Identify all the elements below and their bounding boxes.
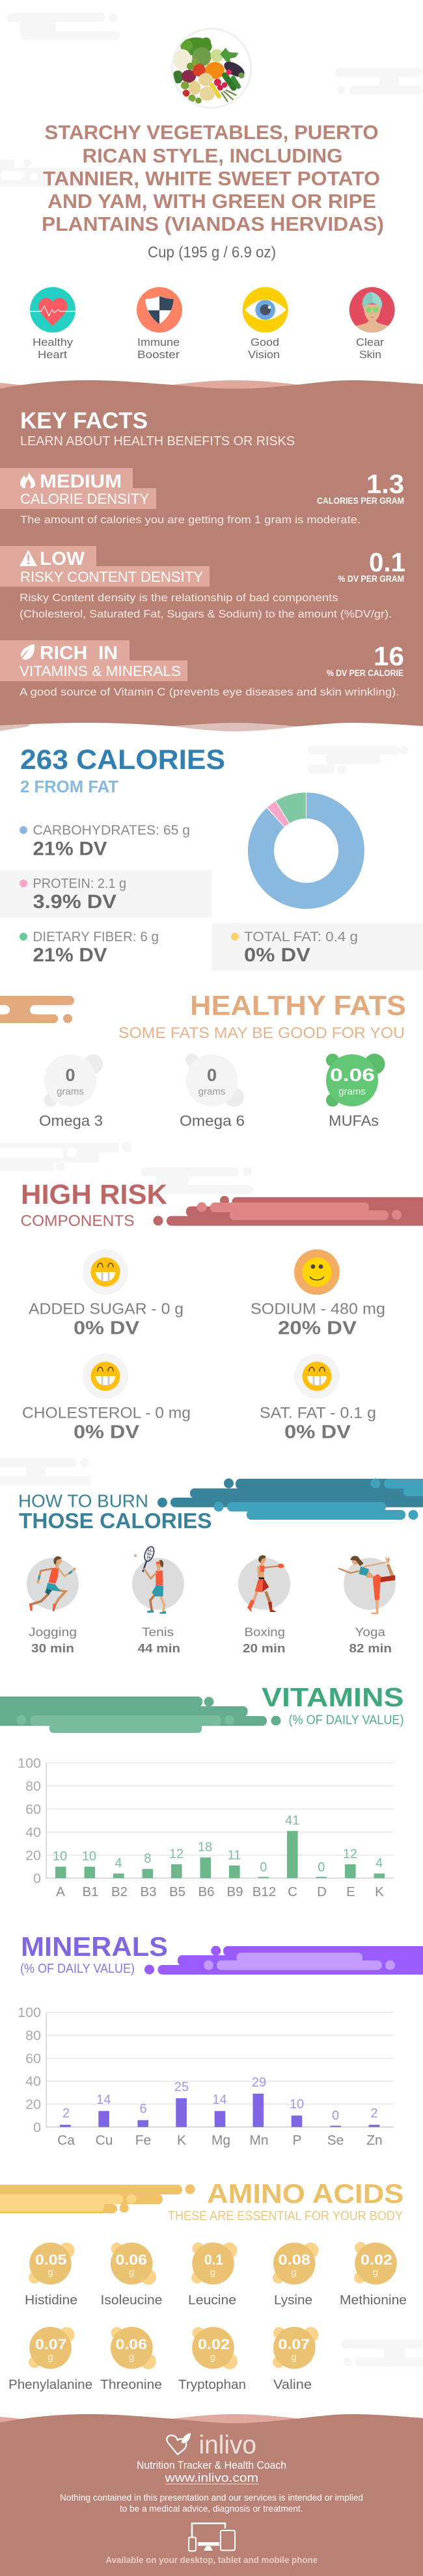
amino: lysine: g <box>291 2267 297 2278</box>
risk: sodium: SODIUM - 480 mg <box>251 1300 385 1318</box>
header graphic: minerals <box>144 1946 423 1975</box>
chart: vitamins: 11 <box>228 1849 241 1863</box>
chart: vitamins: B3 <box>140 1884 157 1899</box>
label: good vision <box>248 336 280 361</box>
title: STARCHY VEGETABLES, PUERTO <box>44 121 379 144</box>
website: www.inlivo.com <box>165 2471 258 2484</box>
legend: dietary fiber <box>20 930 159 966</box>
chart: minerals: 14 <box>212 2093 227 2107</box>
fact: vitamins and minerals: VITAMINS & MINERALS <box>20 663 181 679</box>
chart: minerals: P <box>292 2133 302 2148</box>
panel: key facts <box>0 380 423 731</box>
amino: histidine: Histidine <box>25 2293 77 2308</box>
chart: vitamins: 40 <box>25 1825 41 1840</box>
subheading: minerals: (% OF DAILY VALUE) <box>20 1962 135 1976</box>
chart: vitamins: 20 <box>25 1847 41 1863</box>
risk: saturated fat: SAT. FAT - 0.1 g <box>260 1404 376 1422</box>
fact: vitamins and minerals: A good source of Vitamin C (prevents eye diseases and skin wrinkling). <box>20 686 400 698</box>
risk: cholesterol: 0% DV <box>74 1422 140 1443</box>
background clouds top <box>0 13 423 187</box>
fat: mufas: 0.06 <box>330 1065 375 1085</box>
chart: minerals: 25 <box>174 2080 189 2094</box>
fact: risky content density: % DV PER GRAM <box>338 574 404 584</box>
amino: tryptophan: 0.02 <box>198 2336 230 2352</box>
heading: calories: 263 CALORIES <box>20 744 225 775</box>
amino: phenylalanine: Phenylalanine <box>8 2378 92 2392</box>
chart: minerals: 0 <box>332 2109 339 2123</box>
amino: valine: g <box>291 2352 297 2363</box>
amino: lysine: Lysine <box>274 2293 312 2308</box>
header graphic: burn calories <box>157 1478 423 1520</box>
subheading: components: COMPONENTS <box>21 1212 134 1230</box>
amino: methionine: 0.02 <box>361 2252 392 2268</box>
chart: vitamins: B9 <box>226 1884 243 1899</box>
legend: total fat: 0% DV <box>244 944 310 966</box>
chart: vitamins: 4 <box>375 1856 383 1871</box>
fact: calorie density: CALORIE DENSITY <box>20 491 149 507</box>
label: clear skin <box>356 336 384 361</box>
fat: mufas: MUFAs <box>329 1112 379 1129</box>
wave accents <box>0 380 299 397</box>
subheading: amino acids: THESE ARE ESSENTIAL FOR YOUR BODY <box>168 2209 403 2223</box>
label: good vision: Vision <box>248 348 280 361</box>
heading: amino acids: AMINO ACIDS <box>207 2178 403 2209</box>
risk: saturated fat: 0% DV <box>284 1422 351 1443</box>
icon: devices <box>189 2523 235 2551</box>
fact: calorie density: CALORIES PER GRAM <box>317 496 404 506</box>
amino: histidine: g <box>48 2267 53 2278</box>
chart: vitamins: 0 <box>33 1871 41 1886</box>
amino: isoleucine: g <box>129 2267 134 2278</box>
chart: vitamins: 0 <box>260 1860 267 1875</box>
background clouds high risk <box>0 1143 254 1194</box>
subheading: from fat: 2 FROM FAT <box>20 778 118 796</box>
chart: vitamins: C <box>288 1884 297 1899</box>
heading: vitamins: VITAMINS <box>262 1682 403 1712</box>
amino: leucine: Leucine <box>188 2293 236 2308</box>
label: good vision: Good <box>251 336 279 348</box>
chart: vitamins: B6 <box>198 1884 215 1899</box>
exercise: yoga <box>338 1556 396 1655</box>
chart: vitamins: B1 <box>82 1884 99 1899</box>
heading: key facts: KEY FACTS <box>20 408 148 434</box>
exercise: boxing: 20 min <box>243 1642 285 1655</box>
legend: total fat: TOTAL FAT: 0.4 g <box>244 930 358 944</box>
title: TANNIER, WHITE SWEET POTATO <box>43 167 380 190</box>
chart: minerals: 6 <box>139 2102 147 2116</box>
chart: minerals: Mn <box>249 2133 269 2148</box>
chart: vitamins: 41 <box>285 1814 299 1828</box>
amino: phenylalanine: 0.07 <box>35 2336 66 2352</box>
chart: vitamins: 12 <box>343 1847 357 1862</box>
exercise: boxing <box>238 1555 290 1655</box>
fact: risky content density: (Cholesterol, Saturated Fat, Sugars & Sodium) to the amount (%DV/gr). <box>20 608 392 620</box>
amino: threonine: Threonine <box>100 2378 162 2392</box>
amino: isoleucine: 0.06 <box>116 2252 147 2268</box>
chart: vitamins: 12 <box>169 1847 184 1862</box>
chart: vitamins: B12 <box>252 1884 276 1899</box>
logo: inlivo: inlivo <box>199 2431 256 2460</box>
icon: good vision <box>243 287 288 333</box>
amino: tryptophan: g <box>210 2352 215 2363</box>
chart: minerals: 0 <box>33 2120 41 2135</box>
title: AND YAM, WITH GREEN OR RIPE <box>48 190 376 213</box>
heading: how to burn: HOW TO BURN <box>18 1491 148 1511</box>
icon: immune booster <box>137 287 182 333</box>
logo: inlivo <box>167 2431 256 2460</box>
amino: leucine: 0.1 <box>204 2252 223 2268</box>
exercise: tennis: 44 min <box>138 1642 180 1655</box>
fact: calorie density: MEDIUM <box>40 471 122 492</box>
chart: vitamins: B5 <box>169 1884 185 1899</box>
disclaimer: Nothing contained in this presentation and our services is intended or implied <box>60 2492 363 2503</box>
amino: methionine: g <box>373 2267 378 2278</box>
background cloud burn <box>0 1458 90 1485</box>
chart: minerals: Se <box>327 2133 344 2148</box>
legend: total fat <box>212 923 423 971</box>
disclaimer <box>60 2492 363 2514</box>
heading: high risk: HIGH RISK <box>21 1179 167 1210</box>
chart: vitamins: 100 <box>18 1755 41 1771</box>
fact: risky content density <box>0 546 405 620</box>
chart: vitamins: D <box>317 1884 327 1899</box>
chart: minerals: 60 <box>25 2051 41 2066</box>
legend: carbohydrates: 21% DV <box>33 839 107 859</box>
chart: vitamins: 4 <box>115 1856 122 1871</box>
amino: tryptophan: Tryptophan <box>178 2378 246 2392</box>
amino: tryptophan <box>178 2327 246 2392</box>
background cloud calories <box>308 746 409 774</box>
amino: isoleucine: Isoleucine <box>100 2293 163 2308</box>
risk: sodium: 20% DV <box>278 1318 357 1339</box>
fact: risky content density: RISKY CONTENT DENSITY <box>20 569 203 585</box>
amino: histidine: 0.05 <box>35 2252 66 2268</box>
label: immune booster: Immune <box>137 336 180 348</box>
fat: omega 3: 0 <box>65 1065 75 1085</box>
fact: calorie density <box>0 468 404 526</box>
fact: vitamins and minerals: % DV PER CALORIE <box>327 668 403 678</box>
amino: histidine <box>25 2243 77 2308</box>
risk: added sugar <box>29 1249 184 1339</box>
amino: methionine: Methionine <box>340 2293 407 2308</box>
fat: omega 6 <box>180 1054 245 1129</box>
risk: sodium <box>251 1249 385 1339</box>
legend: dietary fiber: 21% DV <box>33 944 107 966</box>
fat: omega 6: Omega 6 <box>180 1112 245 1129</box>
fact: risky content density: 0.1 <box>369 547 405 577</box>
label: healthy heart <box>33 336 74 361</box>
subheading: key facts: LEARN ABOUT HEALTH BENEFITS OR RISKS <box>20 434 295 449</box>
title: PLANTAINS (VIANDAS HERVIDAS) <box>42 213 384 235</box>
chart: minerals: 80 <box>25 2028 41 2044</box>
amino: lysine <box>273 2243 319 2308</box>
risk: cholesterol: CHOLESTEROL - 0 mg <box>22 1404 191 1422</box>
header graphic: healthy fats <box>0 996 74 1023</box>
amino: threonine: g <box>129 2352 134 2363</box>
label: healthy heart: Heart <box>38 348 67 361</box>
header graphic: high risk <box>154 1196 423 1226</box>
icon: clear skin <box>349 287 395 333</box>
heading: healthy fats: HEALTHY FATS <box>190 991 406 1022</box>
panel: footer <box>0 2414 423 2576</box>
fat: omega 3 <box>39 1054 103 1129</box>
amino: phenylalanine: g <box>48 2352 53 2363</box>
label: healthy heart: Healthy <box>33 336 74 348</box>
chart: vitamins: 18 <box>198 1840 212 1854</box>
chart: vitamins: 8 <box>144 1851 151 1866</box>
chart: vitamins: 80 <box>25 1778 41 1794</box>
heading: minerals: MINERALS <box>21 1931 168 1962</box>
chart: minerals <box>18 2005 394 2148</box>
availability note: Available on your desktop, tablet and mobile phone <box>105 2555 318 2565</box>
header graphic: amino acids <box>0 2184 195 2213</box>
amino: methionine <box>340 2242 407 2308</box>
chart: vitamins: E <box>346 1884 355 1899</box>
exercise: tennis <box>132 1546 184 1655</box>
chart: vitamins: 10 <box>53 1849 67 1864</box>
amino: threonine: 0.06 <box>116 2336 147 2352</box>
legend: protein: 3.9% DV <box>33 891 116 913</box>
legend: dietary fiber: DIETARY FIBER: 6 g <box>33 930 159 944</box>
chart: minerals: 10 <box>290 2098 304 2112</box>
label: clear skin: Skin <box>359 348 381 361</box>
title: RICAN STYLE, INCLUDING <box>82 144 342 167</box>
subheading: healthy fats: SOME FATS MAY BE GOOD FOR YOU <box>118 1024 405 1042</box>
chart: minerals: Ca <box>57 2133 75 2148</box>
exercise: jogging: Jogging <box>29 1626 77 1639</box>
fact: calorie density: The amount of calories you are getting from 1 gram is moderate. <box>20 514 361 526</box>
chart: vitamins: 0 <box>318 1860 325 1875</box>
fat: omega 6: 0 <box>207 1065 217 1085</box>
serving size: Cup (195 g / 6.9 oz) <box>148 244 276 261</box>
chart: vitamins: 60 <box>25 1802 41 1817</box>
chart: minerals: Cu <box>96 2133 113 2148</box>
risk: cholesterol <box>22 1353 191 1443</box>
fat: omega 3: grams <box>57 1086 84 1097</box>
exercise: jogging <box>27 1556 79 1655</box>
fact: risky content density: Risky Content density is the relationship of bad components <box>20 592 338 604</box>
header graphic: vitamins <box>0 1697 281 1733</box>
chart: vitamins: A <box>56 1884 65 1899</box>
amino: valine <box>273 2327 319 2392</box>
legend: protein <box>0 870 212 918</box>
title <box>42 121 384 235</box>
chart: vitamins <box>18 1755 394 1899</box>
amino: lysine: 0.08 <box>279 2252 310 2268</box>
heading: those calories: THOSE CALORIES <box>19 1509 212 1533</box>
chart: vitamins: 10 <box>82 1849 96 1864</box>
exercise: yoga: Yoga <box>355 1626 386 1639</box>
fat: omega 6: grams <box>198 1086 225 1097</box>
amino: isoleucine <box>100 2243 163 2308</box>
chart: minerals: 14 <box>96 2093 111 2107</box>
chart: macronutrient donut <box>247 792 364 909</box>
subheading: vitamins: (% OF DAILY VALUE) <box>289 1713 403 1728</box>
icon: healthy heart <box>30 287 75 333</box>
exercise: jogging: 30 min <box>31 1642 74 1655</box>
fact: vitamins and minerals: 16 <box>374 641 404 671</box>
amino: threonine <box>100 2327 162 2392</box>
amino: valine: 0.07 <box>279 2336 310 2352</box>
amino: valine: Valine <box>273 2378 312 2392</box>
exercise: tennis: Tenis <box>142 1626 174 1639</box>
fat: omega 3: Omega 3 <box>39 1112 103 1129</box>
fact: vitamins and minerals <box>0 640 404 698</box>
legend: carbohydrates <box>20 823 190 859</box>
tagline: Nutrition Tracker & Health Coach <box>137 2459 286 2471</box>
chart: minerals: 20 <box>25 2097 41 2113</box>
exercise: yoga: 82 min <box>349 1642 392 1655</box>
fact: risky content density: LOW <box>40 549 85 569</box>
chart: minerals: 40 <box>25 2074 41 2089</box>
fat: mufas <box>326 1054 385 1129</box>
chart: minerals: 29 <box>252 2075 266 2090</box>
exercise: boxing: Boxing <box>245 1626 285 1639</box>
risk: added sugar: 0% DV <box>74 1318 140 1339</box>
risk: saturated fat <box>260 1353 376 1443</box>
disclaimer: to be a medical advice, diagnosis or treatment. <box>120 2503 303 2514</box>
chart: minerals: 2 <box>62 2107 70 2121</box>
chart: minerals: Zn <box>366 2133 383 2148</box>
chart: minerals: K <box>177 2133 186 2148</box>
amino: phenylalanine <box>8 2327 92 2392</box>
food image <box>172 29 251 108</box>
chart: minerals: Fe <box>135 2133 151 2148</box>
amino: leucine <box>188 2243 237 2308</box>
legend: protein: PROTEIN: 2.1 g <box>33 876 126 891</box>
background cloud amino <box>341 2339 423 2367</box>
label: clear skin: Clear <box>356 336 384 348</box>
risk: added sugar: ADDED SUGAR - 0 g <box>29 1300 184 1318</box>
label: immune booster: Booster <box>137 348 180 361</box>
chart: minerals: 2 <box>370 2107 378 2121</box>
label: immune booster <box>137 336 180 361</box>
chart: vitamins: K <box>375 1884 384 1899</box>
chart: vitamins: B2 <box>111 1884 128 1899</box>
fact: calorie density: 1.3 <box>366 469 404 499</box>
legend: carbohydrates: CARBOHYDRATES: 65 g <box>33 823 190 838</box>
amino: leucine: g <box>210 2267 215 2278</box>
chart: minerals: Mg <box>212 2133 230 2148</box>
chart: minerals: 100 <box>18 2005 41 2020</box>
fat: mufas: grams <box>338 1086 366 1097</box>
fact: vitamins and minerals: RICH IN <box>40 643 118 664</box>
